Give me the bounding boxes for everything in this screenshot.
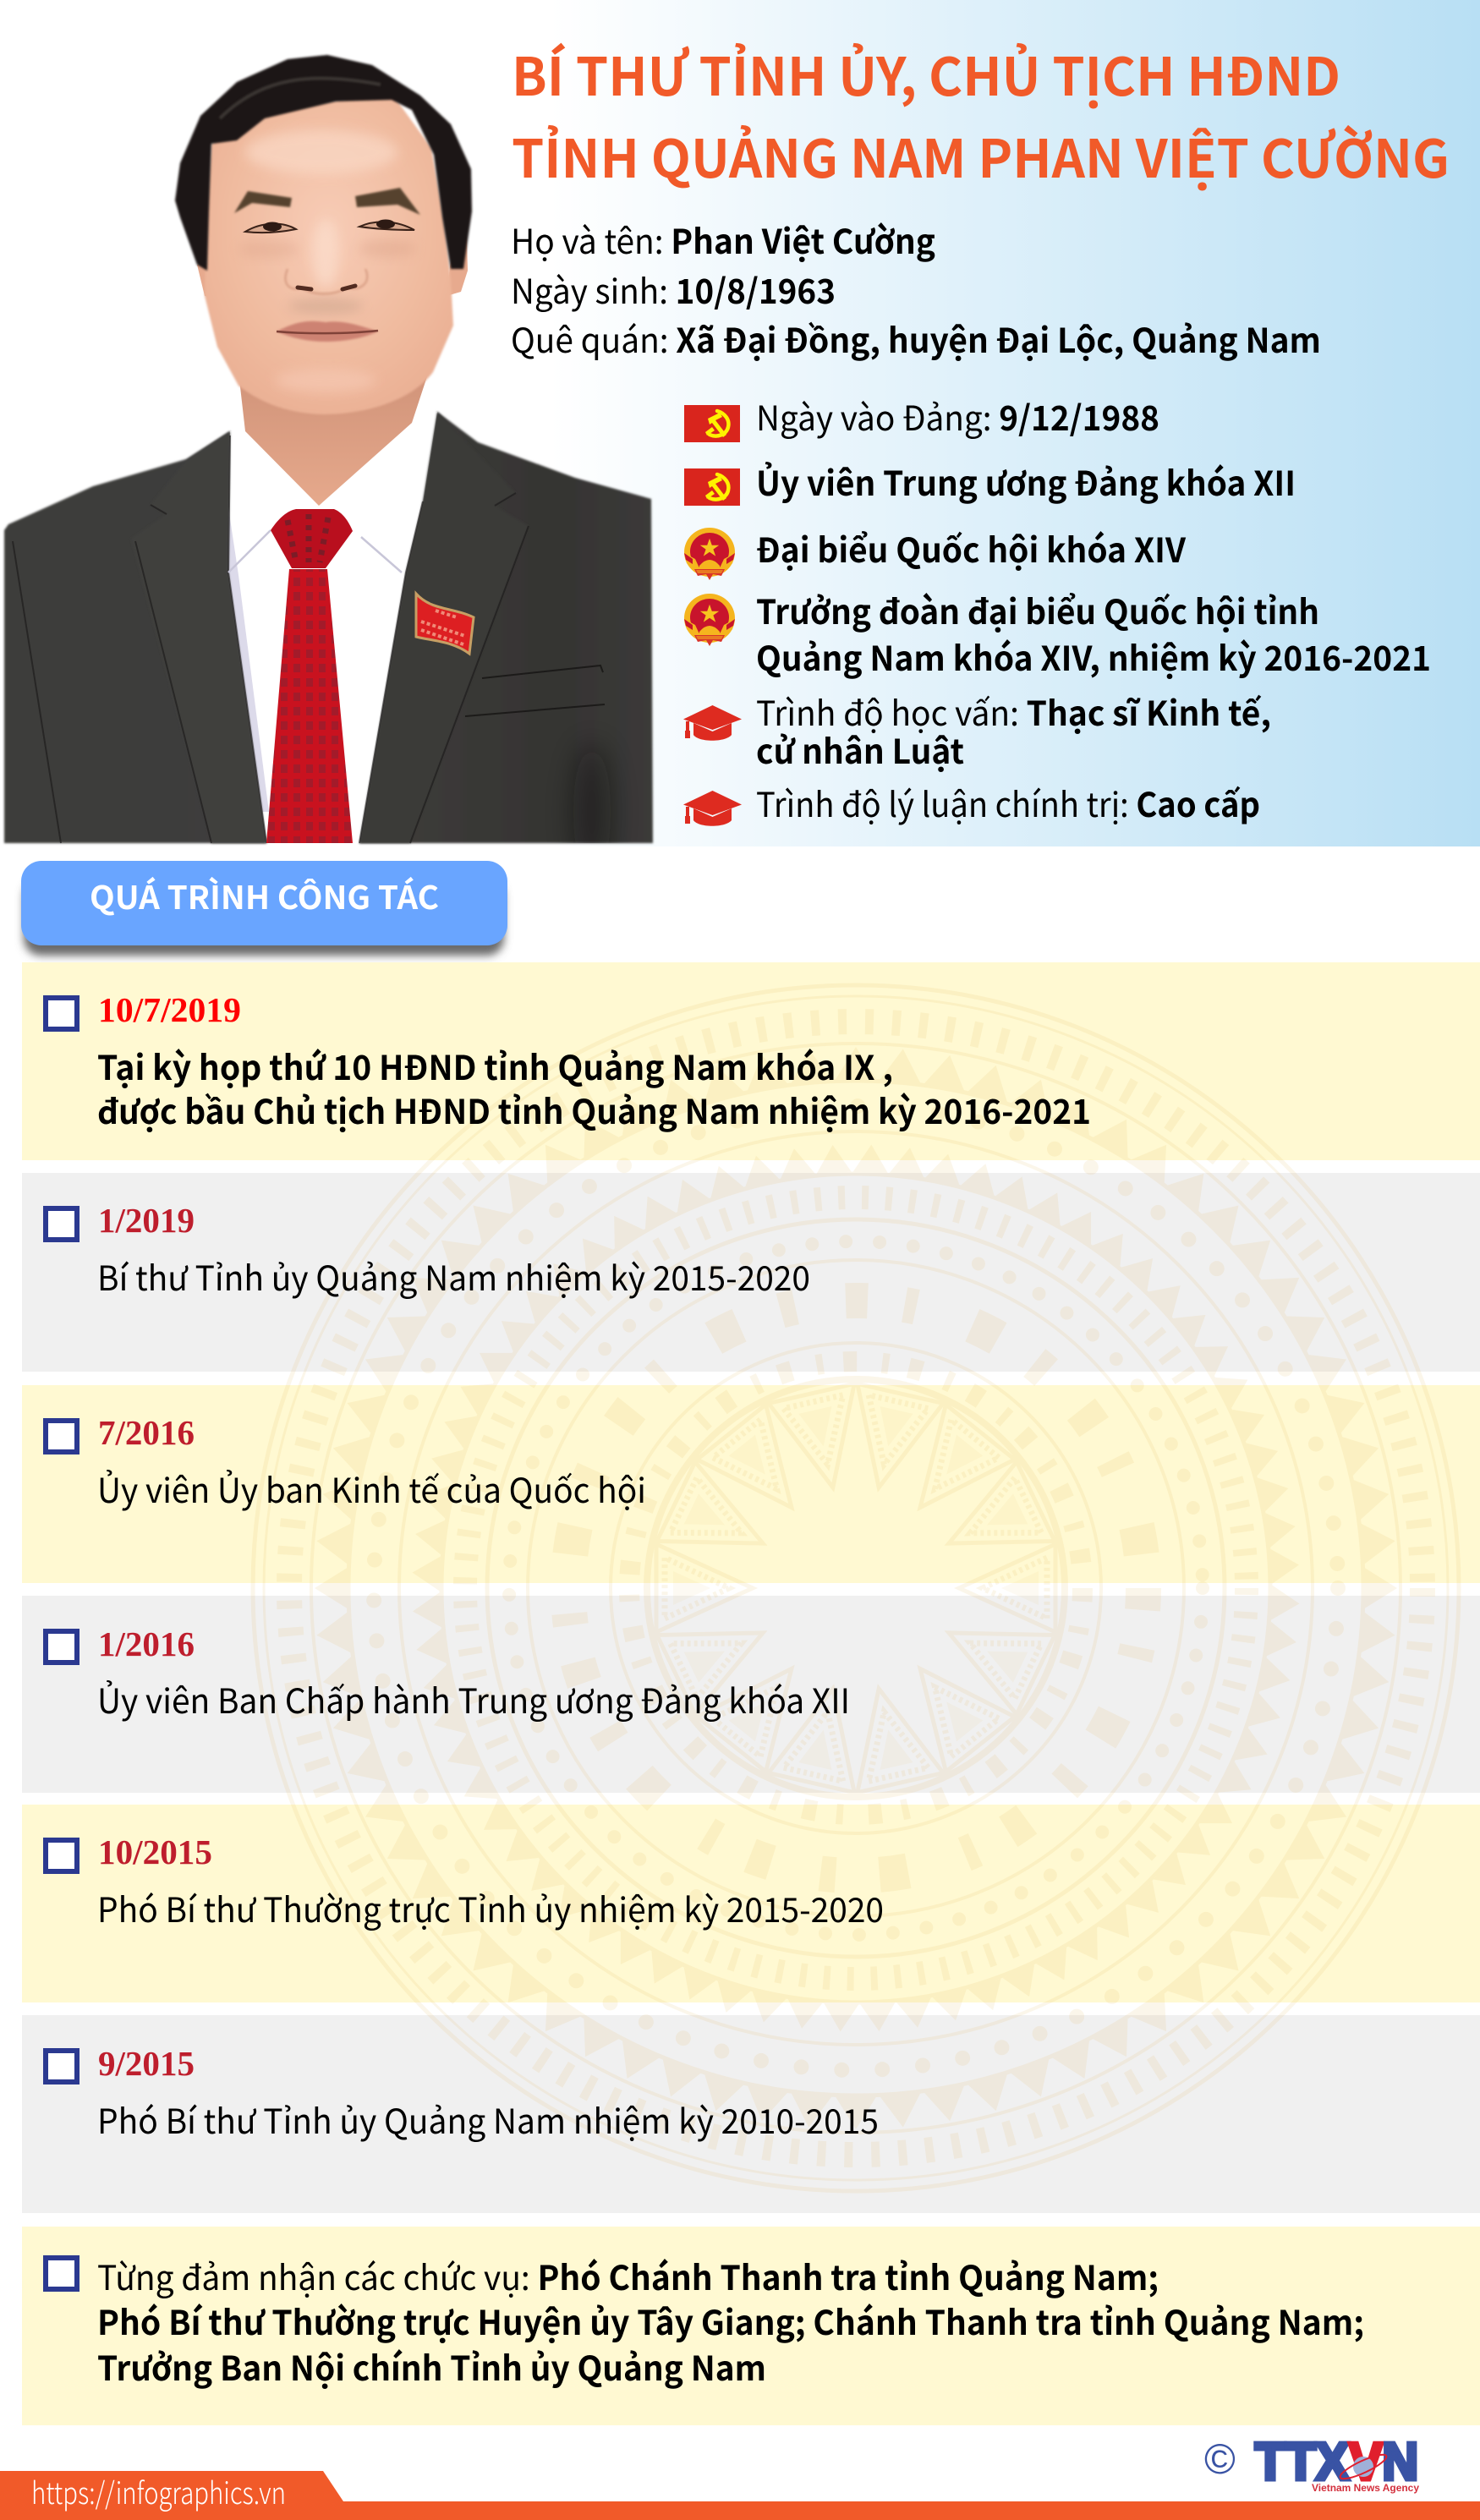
text: education: Trình độ học vấn: Thạc sĩ Kinh tế,: [756, 687, 1271, 736]
orbit: [1338, 2451, 1389, 2483]
text: education: [756, 687, 1271, 774]
description: Phó Bí thư Tỉnh ủy Quảng Nam nhiệm kỳ 2010-2015: [97, 2095, 879, 2144]
portrait: Phan Việt Cường: [4, 55, 653, 879]
description: Trưởng Ban Nội chính Tỉnh ủy Quảng Nam: [97, 2342, 766, 2391]
portrait shirt: [228, 412, 437, 843]
title: TỈNH QUẢNG NAM PHAN VIỆT CƯỜNG: [512, 117, 1450, 193]
text: education: cử nhân Luật: [756, 725, 964, 774]
row: 1/2016: [46, 1624, 850, 1723]
checkbox: [46, 2258, 77, 2289]
description: Phó Bí thư Thường trực Huyện ủy Tây Giang; Chánh Thanh tra tỉnh Quảng Nam;: [97, 2296, 1364, 2345]
portrait lapel pin: [416, 594, 474, 654]
portrait suit shadow: [573, 744, 611, 879]
watermark: bronze drum pattern: [211, 944, 1480, 2232]
portrait hair highlight: [220, 79, 381, 118]
row: 1/2019: [46, 1201, 810, 1301]
text: political theory: Trình độ lý luận chính trị: Cao cấp: [756, 778, 1260, 827]
text: delegation head: Quảng Nam khóa XIV, nhiệm kỳ 2016-2021: [756, 632, 1431, 681]
row: 9/2015: [46, 2044, 879, 2144]
portrait hair: [175, 55, 472, 271]
agency name: Vietnam News Agency: [1312, 2482, 1419, 2494]
description: Tại kỳ họp thứ 10 HĐND tỉnh Quảng Nam khóa IX ,: [97, 1041, 893, 1090]
checkbox: [46, 2051, 77, 2082]
checkbox: [46, 998, 77, 1029]
description: Bí thư Tỉnh ủy Quảng Nam nhiệm kỳ 2015-2020: [97, 1252, 810, 1301]
title: BÍ THƯ TỈNH ỦY, CHỦ TỊCH HĐND: [512, 35, 1340, 111]
description: Ủy viên Ủy ban Kinh tế của Quốc hội: [97, 1464, 646, 1513]
portrait nostrils: [298, 286, 355, 289]
portrait eye left: [245, 222, 296, 233]
portrait neck: [238, 364, 431, 506]
logo: TTXVN Vietnam News Agency: [1204, 2433, 1419, 2494]
personal details: Họ và tên: Phan Việt Cường: [511, 215, 935, 264]
date: 1/2016: [98, 1624, 195, 1663]
checkbox: [46, 1840, 77, 1871]
portrait face shading: [238, 130, 416, 392]
footer bar with url tab: [0, 2469, 1480, 2520]
date: 10/2015: [98, 1832, 212, 1871]
portrait ears: [197, 237, 468, 298]
text: party admission date: Ngày vào Đảng: 9/12/1988: [756, 392, 1159, 441]
portrait lapel edges: [13, 436, 529, 843]
description: Từng đảm nhận các chức vụ: Phó Chánh Thanh tra tỉnh Quảng Nam;: [97, 2251, 1159, 2300]
wordmark: TTXVN: [1255, 2433, 1418, 2491]
portrait lapel right: [359, 412, 529, 843]
icon: party flag: [684, 405, 740, 442]
portrait necktie knot detail: [288, 514, 328, 562]
icon: national emblem: [684, 594, 735, 646]
portrait shirt left shading: [228, 507, 269, 812]
text: national assembly delegate: Đại biểu Quốc hội khóa XIV: [756, 523, 1186, 572]
icon: graduation cap: [683, 705, 742, 741]
portrait collar lines: [228, 530, 402, 572]
row: earlier positions: [46, 2251, 1364, 2391]
panel: header gradient background: [550, 0, 1480, 846]
personal details: Quê quán: Xã Đại Đồng, huyện Đại Lộc, Quảng Nam: [511, 314, 1321, 363]
portrait lip line: [277, 331, 378, 333]
section heading button: QUÁ TRÌNH CÔNG TÁC: [90, 872, 439, 918]
url: https://infographics.vn: [31, 2469, 286, 2513]
description: [97, 1041, 1091, 1134]
date: 1/2019: [98, 1201, 195, 1240]
portrait necktie blade: [266, 569, 353, 843]
description: được bầu Chủ tịch HĐND tỉnh Quảng Nam nhiệm kỳ 2016-2021: [97, 1085, 1091, 1134]
copyright symbol: ©: [1204, 2435, 1236, 2483]
text: central committee: Ủy viên Trung ương Đảng khóa XII: [756, 457, 1296, 506]
text: delegation head: Trưởng đoàn đại biểu Quốc hội tỉnh: [756, 585, 1319, 634]
row: 10/7/2019: [46, 990, 1091, 1134]
icon: national emblem: [684, 528, 735, 580]
description: [97, 2251, 1364, 2391]
icon: party flag: [684, 468, 740, 506]
portrait mouth: [277, 321, 378, 342]
timeline row backgrounds: [22, 962, 1480, 2425]
row: 7/2016: [46, 1413, 646, 1513]
globe: [1353, 2457, 1373, 2477]
portrait eye right: [359, 220, 414, 230]
row: 10/2015: [46, 1832, 884, 1932]
portrait face: [205, 93, 453, 414]
description: Phó Bí thư Thường trực Tỉnh ủy nhiệm kỳ 2015-2020: [97, 1883, 884, 1932]
checkbox: [46, 1208, 77, 1240]
section heading button: [21, 861, 507, 956]
portrait nose: [286, 269, 367, 294]
text: delegation head: [756, 585, 1431, 681]
portrait eyebrow right: [355, 188, 420, 215]
portrait suit jacket: [4, 412, 653, 843]
description: Ủy viên Ban Chấp hành Trung ương Đảng khóa XII: [97, 1674, 850, 1723]
checkbox: [46, 1631, 77, 1663]
icon: graduation cap: [683, 791, 742, 826]
checkbox: [46, 1421, 77, 1452]
personal details: [511, 215, 1321, 363]
date: 10/7/2019: [98, 990, 241, 1029]
portrait lapel left: [131, 431, 266, 843]
portrait necktie knot: [271, 509, 353, 568]
title: [512, 35, 1450, 193]
date: 7/2016: [98, 1413, 195, 1452]
personal details: Ngày sinh: 10/8/1963: [511, 265, 836, 314]
portrait eyebrow left: [234, 191, 292, 213]
portrait pocket: [465, 666, 605, 716]
date: 9/2015: [98, 2044, 195, 2083]
